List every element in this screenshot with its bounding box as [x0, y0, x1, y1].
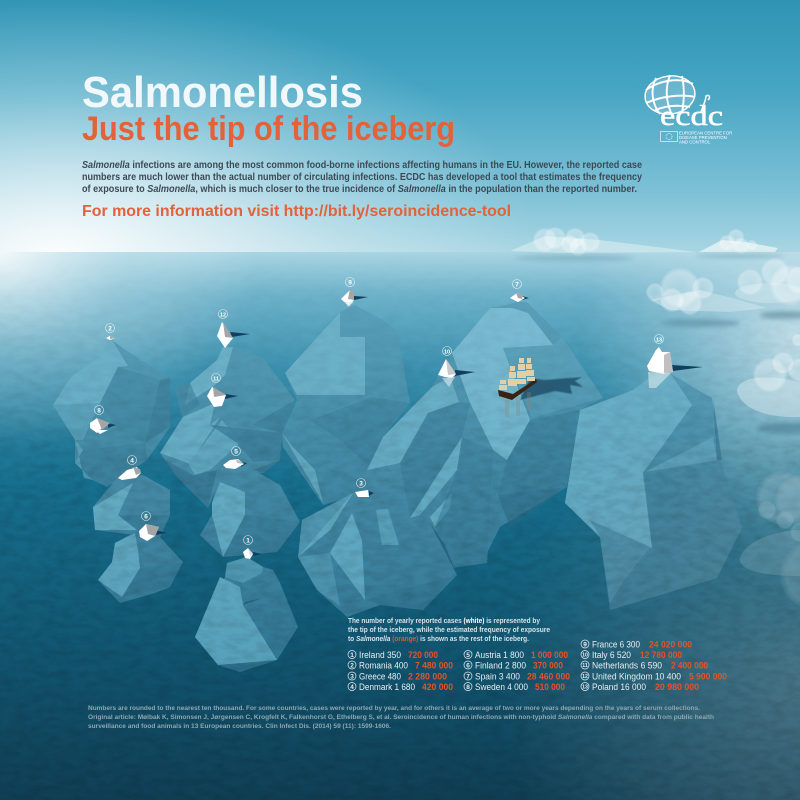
- Spain: [464, 670, 570, 682]
- cloud far left: [510, 227, 697, 261]
- iceberg 4 Denmark: [93, 475, 170, 537]
- tip 1: [243, 548, 262, 559]
- tip 12: [217, 322, 250, 348]
- Romania: 2: [350, 662, 354, 670]
- France: 9: [583, 642, 587, 648]
- footnote: Numbers are rounded to the nearest ten thousand. For some countries, cases were reported by year, and for others it is an average of two or more years depending on the years of serum collections.: [88, 705, 700, 712]
- Greece: [348, 670, 447, 682]
- logo stem: [701, 95, 709, 112]
- lower right haze: [480, 440, 800, 800]
- iceberg 9 France: [282, 305, 410, 505]
- footnote: [88, 705, 714, 730]
- iceberg number labels: 1: [246, 537, 250, 544]
- iceberg 13 Poland: [565, 370, 742, 610]
- tip 10: [438, 359, 475, 387]
- tip 6: [139, 524, 167, 541]
- title: Salmonellosis: [82, 68, 363, 117]
- Ireland: Ireland 350: [359, 650, 401, 661]
- Italy: Italy 6 520: [592, 650, 631, 661]
- tip 5: [223, 459, 247, 469]
- iceberg 12 United Kingdom: [175, 347, 295, 440]
- logo caption: EUROPEAN CENTRE FOR: [679, 130, 732, 136]
- Poland: 20 980 000: [655, 681, 699, 692]
- Sweden: Sweden 4 000: [475, 682, 528, 693]
- Finland: Finland 2 800: [475, 660, 526, 672]
- icon: globe: [643, 73, 697, 117]
- United Kingdom: [581, 670, 727, 682]
- cloud right: [735, 258, 800, 319]
- United Kingdom: 5 900 000: [689, 670, 727, 682]
- iceberg 3 Greece: [298, 493, 457, 617]
- Sweden: [464, 681, 565, 693]
- Austria: Austria 1 800: [475, 650, 524, 661]
- Netherlands: 2 400 000: [671, 660, 708, 670]
- iceberg 2 Romania: [53, 340, 170, 487]
- United Kingdom: 12: [582, 674, 588, 680]
- Sweden: 510 000: [535, 681, 565, 692]
- Netherlands: [581, 660, 708, 672]
- iceberg 5 Austria: [200, 470, 300, 557]
- Ireland: 1: [350, 652, 354, 659]
- Denmark: Denmark 1 680: [359, 682, 415, 693]
- tip 4: [118, 467, 141, 480]
- tip 8: [90, 418, 116, 434]
- tip 9: [341, 289, 368, 307]
- Italy: [581, 649, 682, 661]
- iceberg number labels: 12: [220, 312, 226, 318]
- Finland: [464, 660, 563, 672]
- France: 24 020 000: [649, 638, 692, 650]
- France: France 6 300: [592, 640, 640, 650]
- iceberg number labels: 4: [130, 457, 134, 464]
- legend explanation: The number of yearly reported cases (white) is represented by: [348, 616, 540, 625]
- legend column 3: [581, 638, 727, 693]
- tip 3: [355, 490, 374, 497]
- legend explanation: the tip of the iceberg, while the estimated frequency of exposure: [348, 625, 550, 634]
- Greece: 3: [350, 674, 354, 680]
- Denmark: [348, 681, 453, 693]
- Spain: Spain 3 400: [475, 672, 520, 682]
- Romania: 7 480 000: [415, 660, 453, 670]
- Spain: 28 460 000: [527, 670, 570, 682]
- Austria: 1 000 000: [531, 649, 568, 660]
- Netherlands: 11: [582, 663, 588, 669]
- Finland: 370 000: [533, 660, 563, 670]
- Austria: [464, 649, 568, 661]
- cloud lower right: [737, 334, 800, 433]
- faint cloud near bottom right: [740, 471, 800, 610]
- logo caption: [679, 130, 732, 144]
- iceberg 6 Finland: [98, 532, 183, 603]
- intro paragraph: numbers are much lower than the actual number of circulating infections. ECDC has developed a tool that estimates the frequency: [82, 171, 642, 183]
- legend explanation: [348, 616, 550, 643]
- logo: ECDC: [643, 73, 732, 144]
- subtitle: Just the tip of the iceberg: [82, 110, 455, 148]
- cloud far right: [695, 229, 785, 258]
- ocean texture: [0, 332, 800, 800]
- footnote: surveillance and food animals in 13 European countries. Clin Infect Dis. (2014) 59 (11): 1599-1606.: [88, 723, 391, 730]
- tip 2: [106, 336, 115, 340]
- iceberg number labels: 7: [515, 281, 519, 288]
- Greece: Greece 480: [359, 672, 401, 682]
- intro paragraph: [82, 159, 642, 195]
- EU flag box: [660, 132, 678, 142]
- sky background: [0, 0, 800, 253]
- tip 7: [510, 293, 529, 302]
- tip 13: [647, 347, 703, 388]
- legend column 1: [348, 649, 453, 693]
- iceberg number labels: 8: [97, 407, 101, 414]
- iceberg number labels: 10: [444, 349, 450, 355]
- flag stars: [666, 134, 672, 140]
- Ireland: [348, 649, 438, 661]
- iceberg 7 Spain: [432, 302, 603, 553]
- Romania: Romania 400: [359, 660, 408, 672]
- iceberg number labels: 5: [234, 448, 238, 455]
- iceberg number labels: 6: [144, 513, 148, 520]
- legend explanation: to Salmonella (orange) is shown as the rest of the iceberg.: [348, 634, 529, 643]
- footnote: Original article: Mølbak K, Simonsen J, Jørgensen C, Krogfelt K, Falkenhorst G, Ethelberg S, et al. Seroincidence of human infections with non-typhoid Salmonella compared with data from public health: [88, 714, 714, 721]
- link line: For more information visit http://bit.ly/seroincidence-tool: [82, 203, 511, 220]
- Romania: [348, 660, 453, 672]
- legend column 2: [464, 649, 570, 693]
- iceberg number labels: [94, 278, 664, 544]
- logo caption: AND CONTROL: [679, 140, 711, 144]
- Poland: Poland 16 000: [592, 682, 646, 693]
- United Kingdom: United Kingdom 10 400: [592, 672, 681, 682]
- intro paragraph: Salmonella infections are among the most common food-borne infections affecting humans in the EU. However, the reported case: [82, 159, 642, 171]
- iceberg number labels: 13: [656, 337, 662, 343]
- iceberg number labels: 9: [348, 279, 352, 286]
- tip 11: [207, 387, 238, 407]
- intro paragraph: of exposure to Salmonella, which is much closer to the true incidence of Salmonella in the population than the reported number.: [82, 183, 637, 195]
- logo caption: DISEASE PREVENTION: [679, 135, 727, 140]
- Denmark: 420 000: [422, 681, 453, 692]
- Finland: 6: [466, 662, 470, 670]
- France: [581, 638, 692, 650]
- Ireland: 720 000: [408, 649, 438, 660]
- Poland: 13: [582, 685, 588, 691]
- Netherlands: Netherlands 6 590: [592, 660, 662, 672]
- iceberg number labels: 2: [108, 325, 112, 332]
- Italy: 10: [582, 653, 588, 659]
- Spain: 7: [466, 674, 470, 680]
- sea background: [0, 252, 800, 800]
- iceberg number labels: 3: [359, 480, 363, 487]
- Denmark: 4: [350, 684, 354, 691]
- ship: [498, 358, 583, 417]
- iceberg number labels: 11: [213, 376, 219, 382]
- Poland: [581, 681, 699, 693]
- Italy: 12 780 000: [640, 649, 682, 660]
- iceberg 1 Ireland: [195, 557, 298, 672]
- Sweden: 8: [466, 684, 470, 691]
- cloud middle: [646, 268, 767, 327]
- Austria: 5: [466, 652, 470, 659]
- logo wordmark: ecdc: [660, 100, 723, 132]
- iceberg 11 Netherlands: [160, 403, 282, 508]
- Greece: 2 280 000: [408, 670, 447, 682]
- iceberg 10 Italy: [357, 377, 493, 570]
